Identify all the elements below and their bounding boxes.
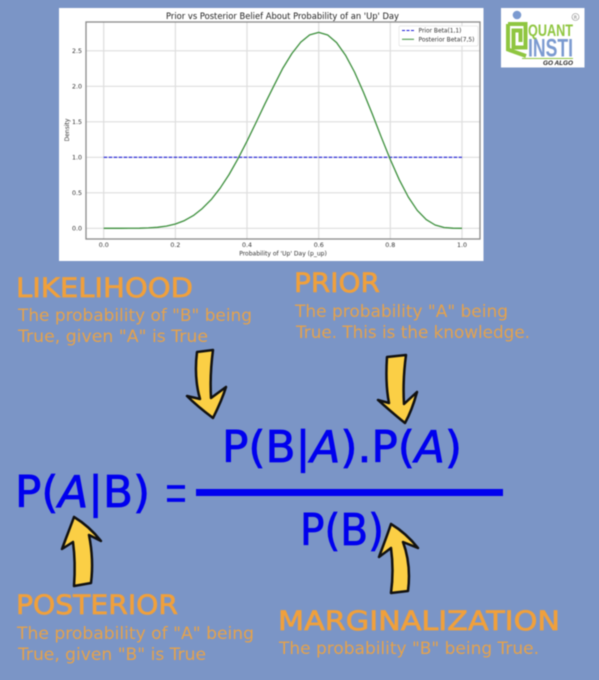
- logo: QuantInsti: [501, 8, 584, 68]
- label: posterior: True, given "B" is True: [17, 645, 206, 665]
- label: likelihood: True, given "A" is True: [17, 327, 208, 347]
- label: posterior: POSTERIOR: [16, 590, 178, 621]
- chart legend: Posterior Beta(7,5): [418, 37, 474, 43]
- label: likelihood: [16, 273, 252, 347]
- label: marginalization: MARGINALIZATION: [278, 606, 560, 637]
- x axis tick labels: 0.8: [385, 242, 395, 249]
- label: marginalization: The probability "B" being True.: [278, 639, 539, 659]
- label: marginalization: [278, 606, 560, 659]
- chart legend: [399, 26, 478, 46]
- arrow: prior to numerator: [378, 355, 417, 423]
- x axis tick labels: 0.4: [242, 242, 252, 249]
- label: likelihood: The probability of "B" being: [17, 306, 252, 326]
- y axis label: Density: [64, 118, 71, 141]
- chart legend: Prior Beta(1,1): [418, 28, 461, 34]
- x axis tick labels: 0.0: [99, 242, 109, 249]
- y axis tick labels: [72, 48, 82, 232]
- prior line: Beta(1,1): [104, 156, 462, 158]
- arrow: posterior term: [62, 517, 101, 586]
- formula: posterior term: P(A|B): [15, 467, 150, 518]
- y axis tick labels: 2.0: [72, 84, 82, 90]
- y axis tick labels: 1.5: [72, 119, 82, 126]
- logo: QuantInsti: GO ALGO: [543, 61, 573, 67]
- label: prior: PRIOR: [294, 268, 380, 299]
- label: prior: True. This is the knowledge.: [295, 323, 530, 343]
- posterior curve: Beta(7,5): [104, 32, 462, 228]
- label: posterior: The probability of "A" being: [16, 624, 254, 644]
- y axis tick labels: 2.5: [72, 48, 82, 55]
- formula: fraction bar: [196, 489, 503, 496]
- logo wordmark: QUANT: [528, 21, 573, 40]
- logo: QuantInsti: INSTI: [528, 34, 573, 62]
- x axis label: Probability of 'Up' Day (p_up): [239, 250, 327, 258]
- label: prior: The probability "A" being: [294, 302, 508, 322]
- formula: numerator: P(B|A).P(A): [222, 422, 462, 473]
- logo: QuantInsti: R: [574, 15, 577, 21]
- arrow: likelihood to numerator: [187, 350, 226, 418]
- x axis tick labels: 0.6: [314, 242, 324, 249]
- y axis tick labels: 0.5: [72, 190, 82, 197]
- label: prior: [294, 268, 530, 343]
- panel: beta distribution line chart: [59, 8, 484, 261]
- chart title: Prior vs Posterior Belief About Probability of an 'Up' Day: [166, 11, 399, 21]
- label: posterior: [16, 590, 254, 665]
- label: likelihood: LIKELIHOOD: [16, 273, 193, 304]
- x axis tick labels: 1.0: [457, 242, 467, 249]
- y axis tick labels: 1.0: [72, 154, 82, 162]
- x axis tick labels: 0.2: [170, 242, 180, 249]
- arrow: marginalization to denominator: [379, 524, 418, 593]
- x axis tick labels: [99, 242, 467, 249]
- formula: denominator: P(B): [300, 505, 384, 556]
- y axis tick labels: 0.0: [72, 226, 82, 232]
- logo icon: [508, 11, 526, 56]
- formula: equals sign: [167, 487, 185, 500]
